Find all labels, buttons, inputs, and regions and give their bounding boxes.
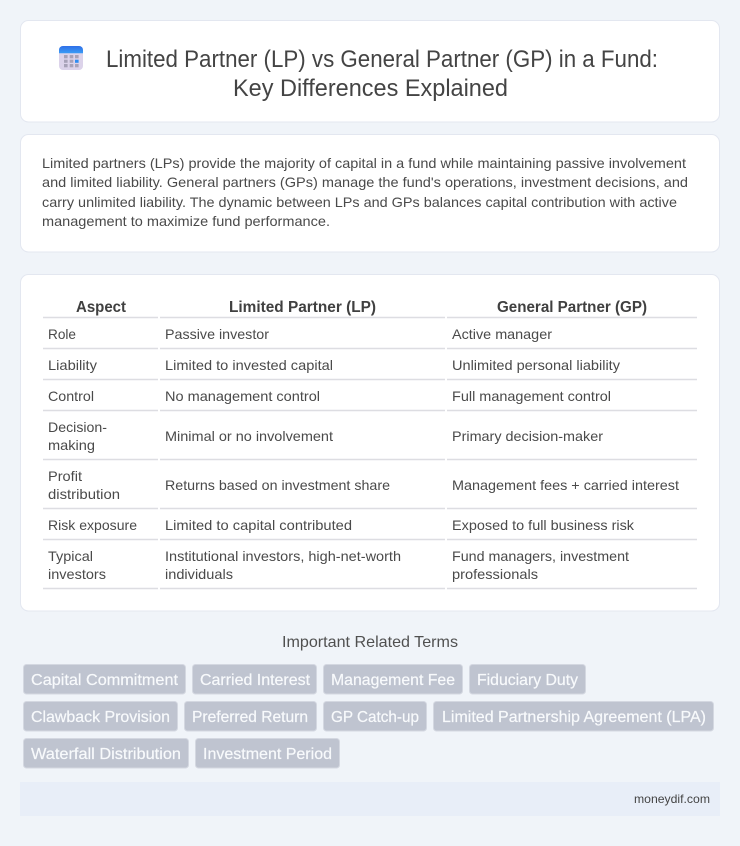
related term tags: Carried Interest bbox=[200, 672, 311, 689]
related term tags: Management Fee bbox=[331, 672, 455, 689]
related term tags: GP Catch-up bbox=[331, 709, 419, 726]
row: typical investors bbox=[48, 548, 629, 582]
table header bbox=[76, 299, 647, 316]
panel: title card bbox=[20, 20, 720, 122]
intro text: and limited liability. General partners (GPs) manage the fund's operations, investment decisions, and bbox=[42, 174, 688, 190]
row: role bbox=[48, 326, 552, 342]
related term tags: Waterfall Distribution bbox=[31, 746, 181, 763]
title: Key Differences Explained bbox=[233, 75, 508, 102]
title: Limited Partner (LP) vs General Partner (GP) in a Fund: bbox=[106, 46, 658, 73]
row: risk exposure: Risk exposure bbox=[48, 517, 137, 533]
row: role: Role bbox=[48, 326, 76, 342]
footer bbox=[20, 782, 720, 816]
row: profit distribution: distribution bbox=[48, 486, 120, 502]
intro text: management to maximize fund performance. bbox=[42, 213, 330, 229]
row: typical investors: professionals bbox=[452, 566, 538, 582]
row: decision-making: Decision- bbox=[48, 419, 107, 435]
row: liability bbox=[48, 357, 620, 373]
row: risk exposure: Limited to capital contributed bbox=[165, 517, 352, 533]
row: liability: Limited to invested capital bbox=[165, 357, 333, 373]
row: control: No management control bbox=[165, 388, 320, 404]
row: liability: Unlimited personal liability bbox=[452, 357, 620, 373]
row: role: Passive investor bbox=[165, 326, 269, 342]
row: decision-making bbox=[48, 419, 603, 453]
row: control: Full management control bbox=[452, 388, 611, 404]
related term tags: Investment Period bbox=[203, 746, 332, 763]
related term tags bbox=[24, 664, 714, 768]
row: control: Control bbox=[48, 388, 94, 404]
row: decision-making: Minimal or no involvement bbox=[165, 428, 333, 444]
row: typical investors: investors bbox=[48, 566, 106, 582]
row: profit distribution bbox=[48, 468, 679, 502]
intro text: Limited partners (LPs) provide the majority of capital in a fund while maintaining passive involvement bbox=[42, 155, 686, 171]
related term tags: Clawback Provision bbox=[31, 709, 170, 726]
panel: introduction bbox=[20, 134, 720, 252]
footer: moneydif.com bbox=[634, 792, 710, 806]
row: profit distribution: Management fees + carried interest bbox=[452, 477, 679, 493]
row: profit distribution: Returns based on investment share bbox=[165, 477, 390, 493]
icon: calendar bbox=[59, 46, 83, 70]
intro text bbox=[42, 155, 688, 229]
related term tags: Fiduciary Duty bbox=[477, 672, 578, 689]
panel: comparison table bbox=[20, 274, 720, 611]
row: profit distribution: Profit bbox=[48, 468, 82, 484]
row: liability: Liability bbox=[48, 357, 97, 373]
related term tags: Preferred Return bbox=[192, 709, 308, 726]
row: typical investors: Typical bbox=[48, 548, 93, 564]
row: decision-making: making bbox=[48, 437, 95, 453]
intro text: carry unlimited liability. The dynamic between LPs and GPs balances capital contribution with active bbox=[42, 194, 677, 210]
row: risk exposure: Exposed to full business risk bbox=[452, 517, 635, 533]
row: typical investors: individuals bbox=[165, 566, 233, 582]
table header: Aspect bbox=[76, 299, 126, 316]
table header: General Partner (GP) bbox=[497, 299, 647, 316]
heading: related terms: Important Related Terms bbox=[282, 634, 458, 651]
table header: Limited Partner (LP) bbox=[229, 299, 376, 316]
row: risk exposure bbox=[48, 517, 635, 533]
row: typical investors: Fund managers, investment bbox=[452, 548, 629, 564]
related term tags: Limited Partnership Agreement (LPA) bbox=[442, 709, 706, 726]
row: typical investors: Institutional investors, high-net-worth bbox=[165, 548, 401, 564]
row: role: Active manager bbox=[452, 326, 552, 342]
row: control bbox=[48, 388, 611, 404]
related term tags: Capital Commitment bbox=[31, 672, 179, 689]
title bbox=[106, 46, 658, 102]
row: decision-making: Primary decision-maker bbox=[452, 428, 603, 444]
